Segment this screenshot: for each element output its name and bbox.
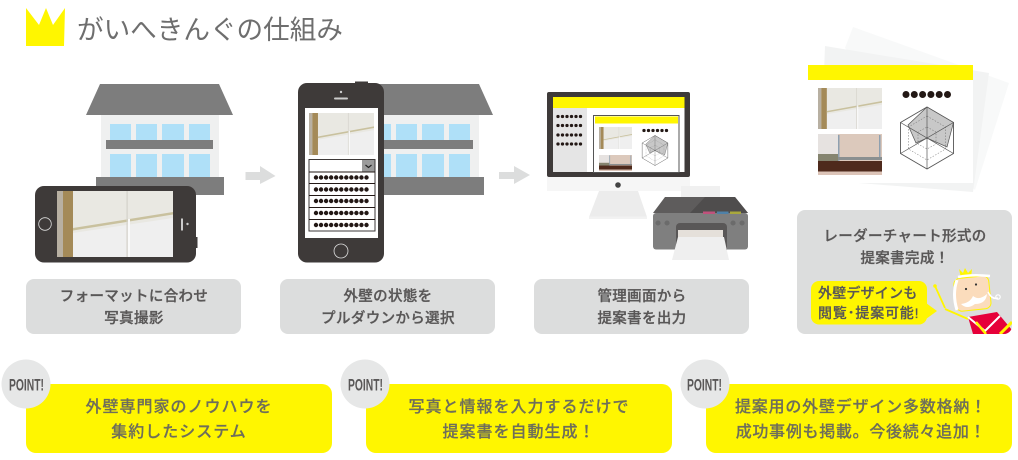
- caption 4 with speech bubble and mascot: [797, 210, 1012, 334]
- speech bubble: 閲覧･提案可能!: [818, 305, 919, 321]
- caption 1: フォーマットに合わせ: [60, 288, 208, 305]
- point badge 2: POINT!: [348, 376, 383, 394]
- caption 1: 写真撮影: [104, 309, 164, 327]
- caption 1: [26, 279, 241, 334]
- speech bubble: 外壁デザインも: [818, 285, 917, 301]
- point 1: 外壁専門家のノウハウを: [85, 398, 273, 416]
- title: がいへきんぐの仕組み: [77, 15, 343, 45]
- point badge 1: [2, 360, 50, 408]
- point 3: [680, 360, 1012, 453]
- icon: landscape smartphone: [35, 186, 198, 262]
- point 2: 提案書を自動生成！: [442, 423, 596, 441]
- icon: portrait smartphone with dropdown: [298, 82, 384, 262]
- caption 3: 提案書を出力: [597, 310, 687, 327]
- point 3: 提案用の外壁デザイン多数格納！: [735, 397, 987, 416]
- arrow 2: [499, 166, 530, 184]
- point 2: [340, 360, 672, 453]
- icon: house: [86, 84, 233, 195]
- mascot: king: [933, 268, 1012, 334]
- point 1: [2, 360, 332, 453]
- point badge 1: POINT!: [9, 376, 44, 394]
- dropdown list: [309, 160, 375, 231]
- point badge 3: POINT!: [687, 376, 722, 394]
- step 3 illustration: monitor and printer: [547, 92, 748, 260]
- point 2: 写真と情報を入力するだけで: [408, 398, 630, 416]
- point 1: 集約したシステム: [111, 423, 247, 441]
- caption 3: [534, 279, 749, 334]
- arrow 1: [246, 166, 276, 184]
- caption 4 with speech bubble and mascot: 提案書完成！: [860, 250, 950, 267]
- crown icon: [26, 8, 65, 46]
- point badge 2: [340, 360, 390, 408]
- caption 2: [280, 279, 495, 334]
- step 1 illustration: house and landscape phone: [35, 84, 233, 262]
- icon: printer: [653, 186, 748, 260]
- caption 3: 管理画面から: [597, 287, 687, 305]
- front proposal page: [808, 65, 973, 183]
- icon: apple logo: [615, 182, 621, 188]
- point badge 3: [680, 360, 730, 408]
- point 3: 成功事例も掲載。今後続々追加！: [736, 423, 986, 441]
- speech bubble: [811, 281, 937, 324]
- icon: house behind phone: [346, 84, 493, 195]
- step 2 illustration: house and portrait phone: [298, 82, 493, 262]
- caption 2: プルダウンから選択: [321, 309, 455, 327]
- caption 2: 外壁の状態を: [343, 287, 433, 305]
- step 4 illustration: stacked proposal documents: [808, 27, 1009, 192]
- caption 4 with speech bubble and mascot: レーダーチャート形式の: [823, 227, 987, 245]
- icon: desktop monitor: [547, 92, 690, 219]
- radar chart: [900, 107, 954, 169]
